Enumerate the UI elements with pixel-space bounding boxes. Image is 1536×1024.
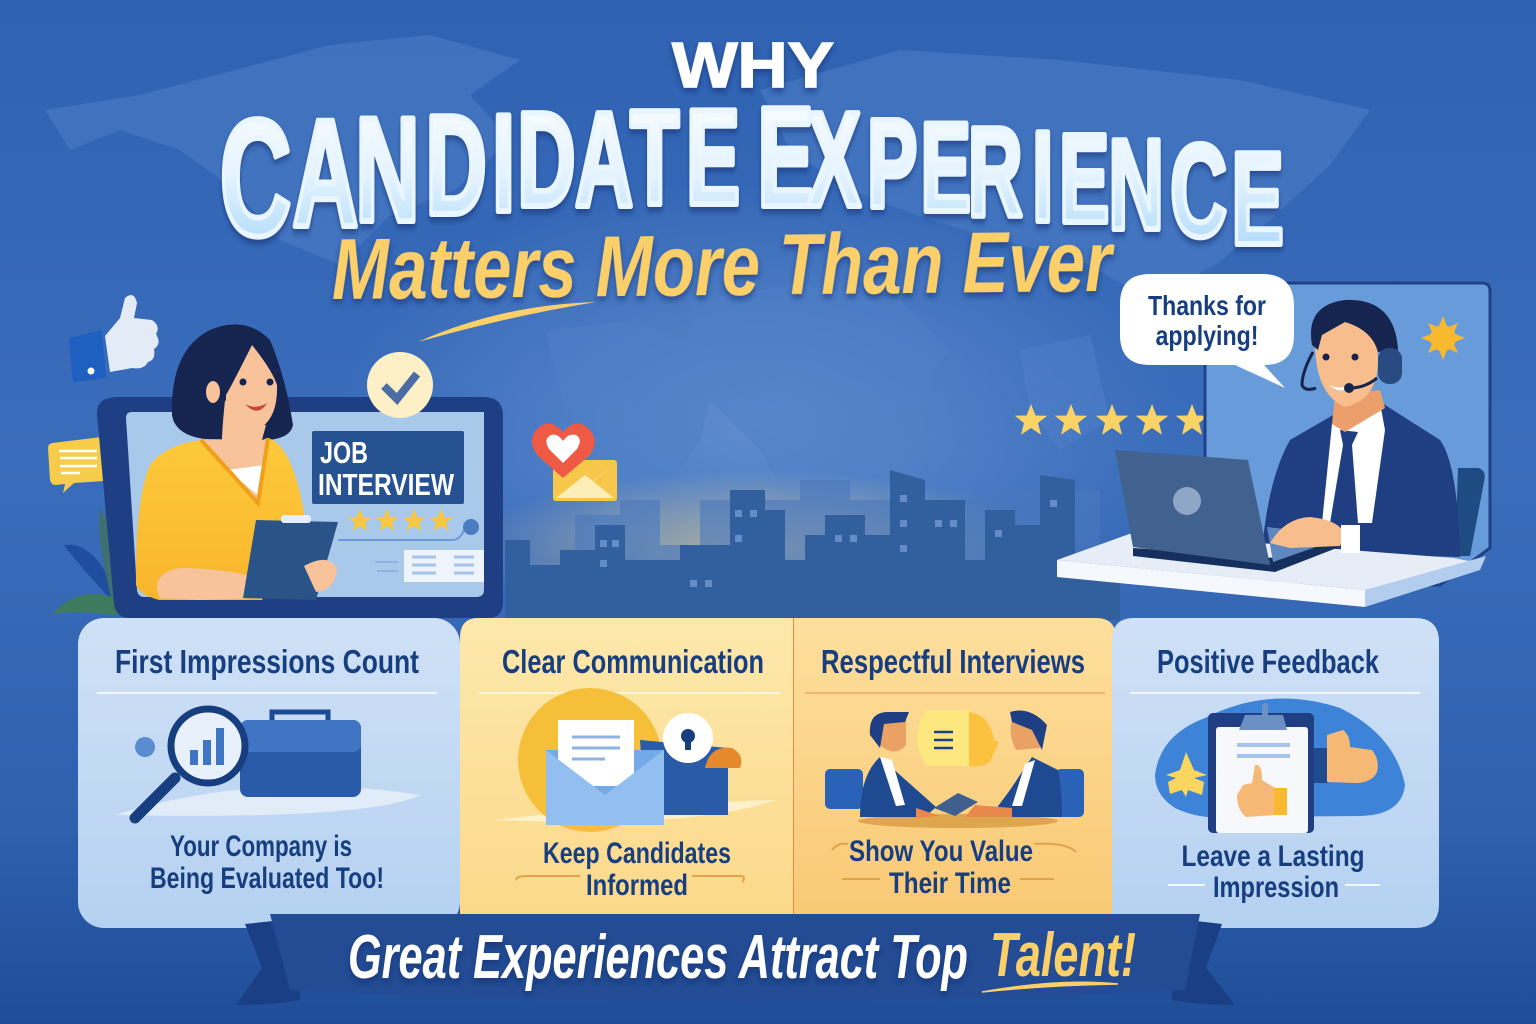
five stars	[1015, 404, 1208, 435]
title line: candidate experience: T	[630, 82, 679, 233]
icon: thumbs up	[69, 295, 159, 382]
icon: envelopes	[495, 688, 775, 832]
wall screen	[1205, 283, 1490, 585]
heart	[532, 423, 595, 478]
title line: candidate experience: E	[1059, 109, 1109, 250]
title line: candidate experience: A	[575, 84, 633, 235]
icon: check badge	[367, 352, 433, 418]
icon: sun	[1421, 316, 1465, 360]
title line: candidate experience: D	[425, 85, 487, 244]
caption	[832, 835, 1076, 900]
panel: respectful interviews	[793, 618, 1116, 914]
heading: First Impressions Count	[115, 643, 419, 680]
connector and dial	[338, 530, 464, 540]
plant	[52, 508, 125, 616]
icon: heart and envelope	[532, 423, 617, 501]
title line: candidate experience: C	[1170, 117, 1227, 265]
icon: chat note	[48, 437, 108, 493]
title line: candidate experience: E	[757, 77, 814, 236]
illustration: recruiter at desk	[1015, 274, 1490, 607]
caption	[517, 837, 744, 902]
title line: matters more than ever: Matters More Than Ever	[331, 214, 1116, 318]
banner: great experiences attract top talent: Great Experiences Attract Top	[348, 923, 968, 992]
laptop	[1115, 450, 1360, 572]
illustration: candidate at tablet	[48, 295, 503, 618]
caption: Keep Candidates	[543, 837, 731, 870]
rating stars	[348, 509, 453, 531]
hand	[1270, 517, 1345, 548]
job interview sign: INTERVIEW	[318, 467, 455, 502]
speech bubble: applying!	[1156, 320, 1258, 351]
icon: clipboard with thumbs up	[1155, 699, 1405, 833]
title	[220, 29, 1284, 342]
caption: Being Evaluated Too!	[150, 862, 384, 895]
title line: candidate experience: N	[1108, 113, 1164, 257]
city skyline	[460, 470, 1120, 630]
heading: Clear Communication	[502, 643, 764, 680]
title line: candidate experience: P	[867, 94, 917, 235]
panel: clear communication	[460, 618, 793, 914]
desk	[1057, 533, 1486, 607]
icon: two people talking	[825, 710, 1084, 828]
title line: candidate experience: N	[355, 88, 420, 254]
title line: candidate experience: A	[292, 88, 358, 259]
title line: candidate experience: I	[1032, 105, 1054, 249]
caption: Your Company is	[170, 830, 352, 863]
chair	[1455, 468, 1485, 556]
banner: great experiences attract top talent: Talent!	[990, 921, 1136, 990]
candidate woman	[136, 324, 338, 600]
icon: magnifier and briefcase	[115, 709, 420, 818]
speech bubble	[1120, 274, 1294, 388]
title line: candidate experience: D	[517, 84, 576, 235]
tablet	[97, 397, 503, 618]
title line: candidate experience: C	[220, 86, 292, 271]
title line: candidate experience: E	[1231, 125, 1284, 273]
caption: Their Time	[889, 867, 1011, 900]
caption: Informed	[586, 869, 688, 902]
caption: Show You Value	[849, 835, 1033, 868]
title line: candidate experience: E	[686, 80, 740, 233]
title underline swoosh	[418, 302, 596, 342]
speech bubble: Thanks for	[1148, 290, 1266, 321]
panel: positive feedback	[1112, 618, 1439, 928]
title line: candidate experience: X	[807, 84, 861, 235]
caption	[1168, 840, 1380, 904]
job interview sign	[312, 431, 464, 504]
small form	[375, 550, 484, 582]
job interview sign: JOB	[320, 435, 368, 470]
caption: Leave a Lasting	[1182, 840, 1364, 873]
title line: why: WHY	[672, 29, 834, 101]
heading: Respectful Interviews	[821, 643, 1085, 680]
title line: candidate experience: I	[492, 86, 515, 241]
panel: first impressions count	[78, 618, 460, 928]
recruiter	[1262, 300, 1460, 557]
world map backdrop	[45, 35, 1370, 560]
envelope	[553, 460, 617, 501]
title line: candidate experience: R	[968, 102, 1023, 244]
caption: Impression	[1213, 871, 1339, 904]
heading: Positive Feedback	[1157, 643, 1379, 680]
caption	[150, 830, 384, 895]
banner: great experiences attract top talent	[236, 914, 1235, 1005]
title line: candidate experience: E	[920, 97, 971, 239]
